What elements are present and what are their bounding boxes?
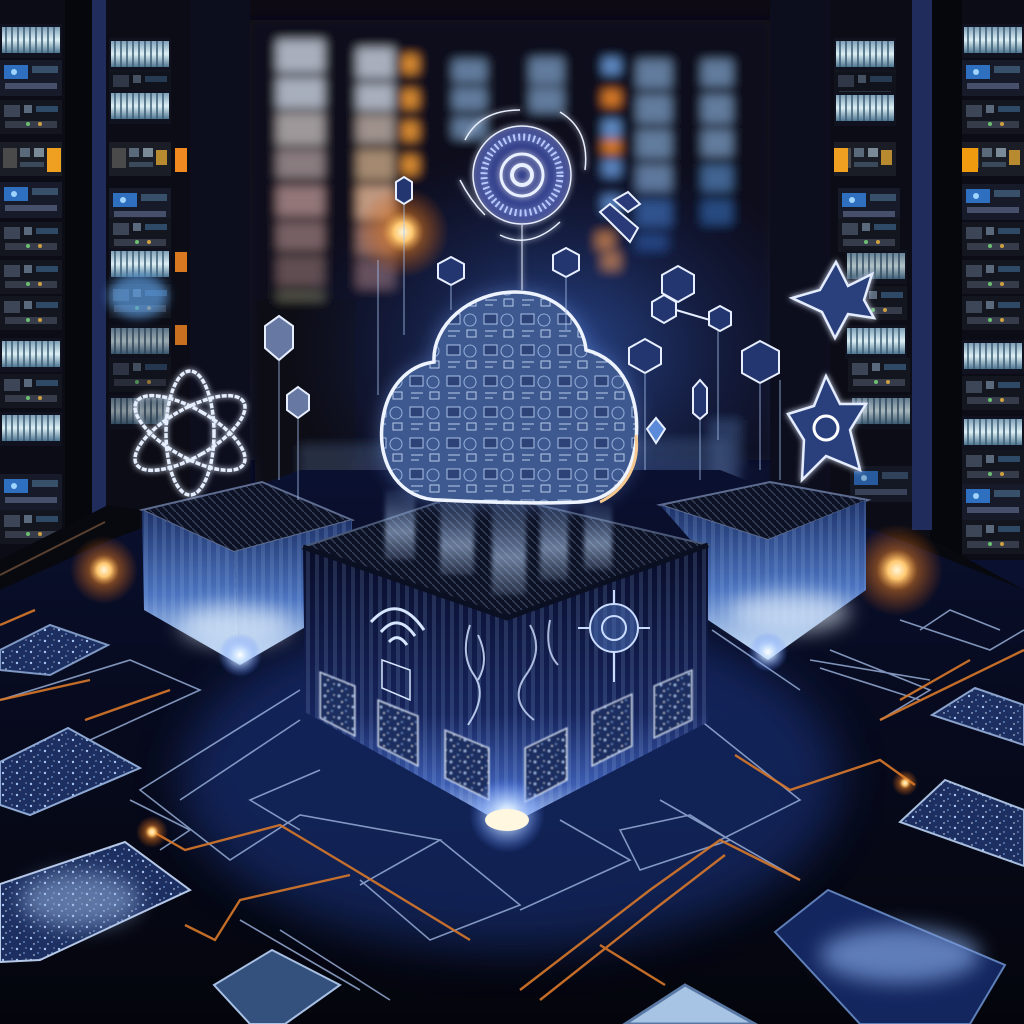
icon: atom hologram <box>124 371 256 495</box>
screen: lower right <box>775 890 1005 1024</box>
panel: blurred back server racks <box>250 20 770 490</box>
icon: radial dial <box>578 590 650 682</box>
screen: mid left <box>0 728 140 815</box>
container top grate <box>303 490 708 618</box>
panel: left server rack <box>0 0 250 595</box>
icon: hexagon nodes <box>265 177 779 443</box>
screen: bottom <box>214 950 340 1024</box>
glow: orange lights <box>70 186 943 848</box>
screen: upper right <box>932 688 1024 745</box>
blue haze behind the cloud <box>290 140 830 560</box>
icon: radial gear hologram <box>460 110 586 290</box>
circuit traces <box>0 610 1024 1000</box>
container: front centre <box>303 490 708 853</box>
container left face <box>303 547 507 826</box>
container right face <box>507 545 708 826</box>
screen: bottom right small <box>625 985 755 1024</box>
chips on container <box>320 670 692 802</box>
icon: star flower upper right <box>792 262 874 338</box>
container: back left <box>142 482 352 677</box>
orange circuit traces <box>0 610 1024 1000</box>
cloud <box>382 292 637 503</box>
screen: upper left <box>0 625 108 675</box>
icon: blurred sparkle top left <box>108 274 168 318</box>
icon: circuit glyph left <box>466 625 484 725</box>
panel: right server rack <box>770 0 1024 625</box>
light column from container to cloud <box>385 490 612 595</box>
icon: star flower lower right <box>788 376 866 480</box>
panel: circuit board floor <box>0 470 1024 1024</box>
hologram stems <box>279 205 780 500</box>
screen: lower left <box>0 842 190 962</box>
container: back right <box>660 482 868 672</box>
icon: wifi symbol <box>371 609 424 700</box>
screen: mid right <box>900 780 1024 866</box>
icon: circuit glyph centre <box>519 620 558 720</box>
icon: small chips near gear <box>600 192 640 242</box>
